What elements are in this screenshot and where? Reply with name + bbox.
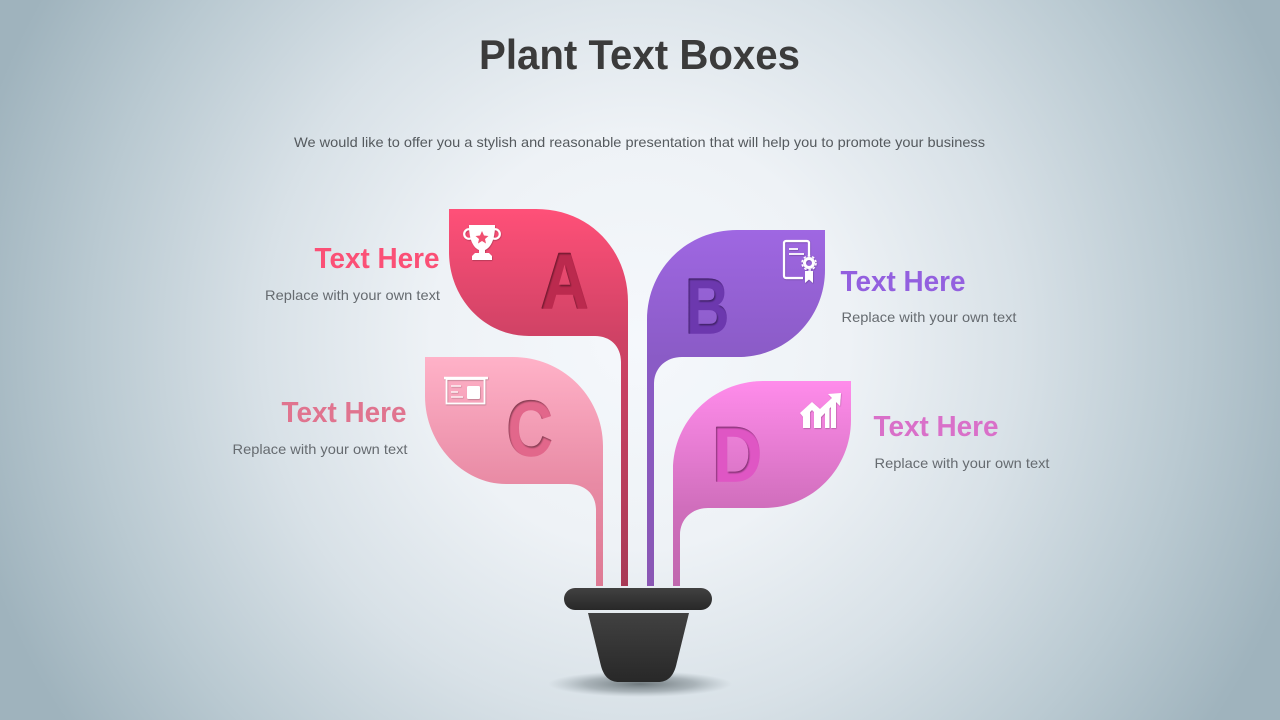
subtitle: We would like to offer you a stylish and reasonable presentation that will help you to promote your business bbox=[294, 134, 985, 150]
letter B: B bbox=[685, 262, 729, 350]
text block D: Text Here bbox=[874, 411, 998, 443]
icon: certificate bbox=[784, 241, 816, 283]
text block A bbox=[265, 243, 440, 303]
text block B: Text Here bbox=[840, 266, 966, 298]
text block B: Replace with your own text bbox=[842, 309, 1017, 325]
leaf B bbox=[647, 230, 825, 586]
icon: presentation board bbox=[444, 378, 488, 404]
icon: growth chart bbox=[800, 393, 841, 428]
text block D: Replace with your own text bbox=[874, 455, 1050, 471]
leaf C bbox=[425, 357, 603, 586]
leaf D bbox=[673, 381, 851, 586]
letter A: A bbox=[540, 236, 588, 325]
text block C bbox=[232, 397, 408, 457]
letter C: C bbox=[506, 384, 552, 472]
pot shadow bbox=[548, 671, 732, 697]
text block B bbox=[840, 266, 1017, 325]
title: Plant Text Boxes bbox=[479, 31, 800, 78]
text block D bbox=[874, 411, 1050, 471]
letter D: D bbox=[712, 410, 762, 498]
pot rim bbox=[564, 588, 712, 610]
text block A: Replace with your own text bbox=[265, 287, 440, 303]
leaf A bbox=[449, 209, 628, 586]
pot body bbox=[588, 613, 689, 682]
text block C: Replace with your own text bbox=[232, 441, 408, 457]
pot bbox=[548, 588, 732, 697]
text block A: Text Here bbox=[314, 243, 440, 275]
text block C: Text Here bbox=[282, 397, 406, 429]
icon: trophy bbox=[464, 225, 500, 260]
